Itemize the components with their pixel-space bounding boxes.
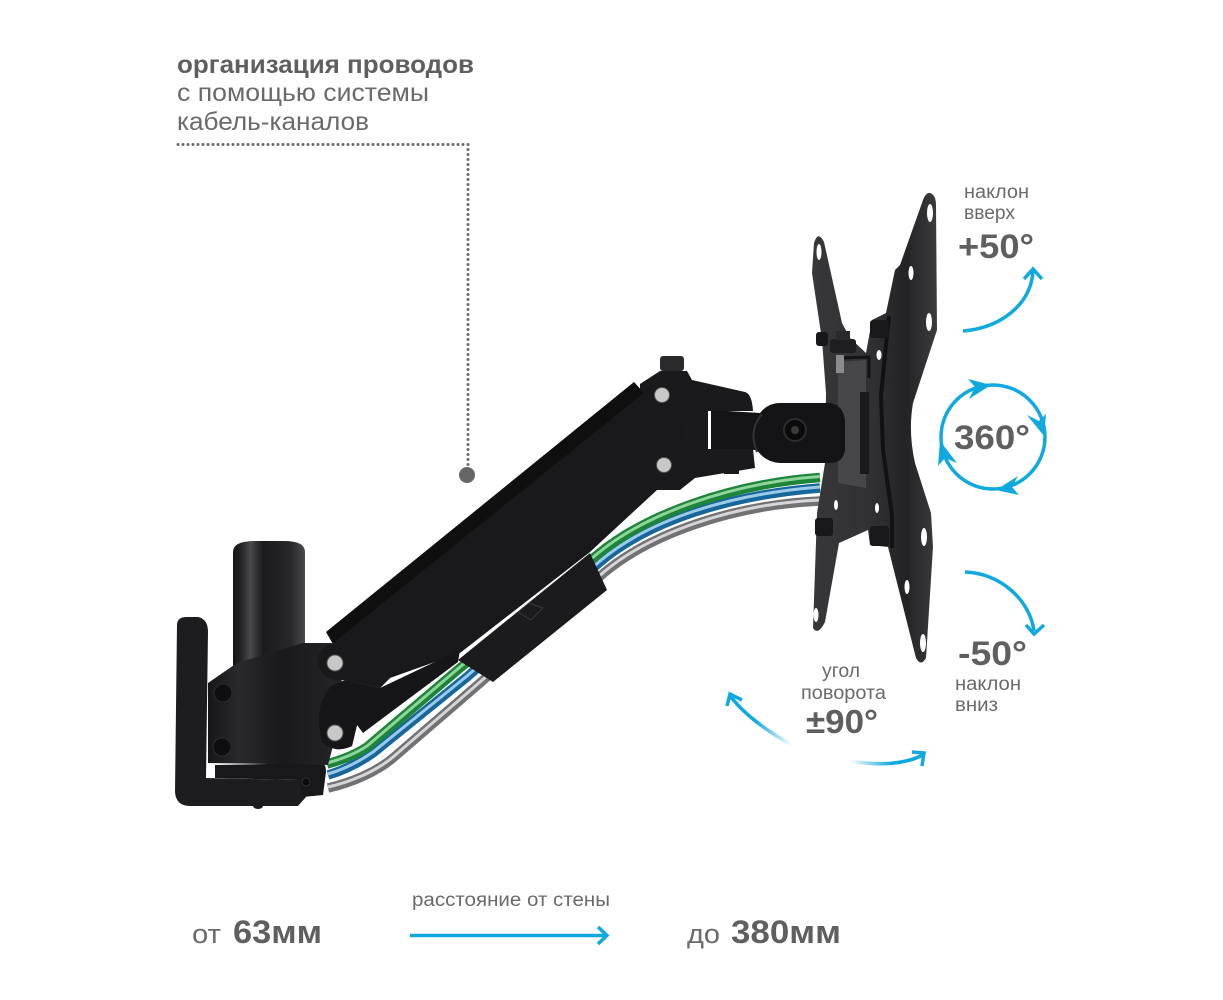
label: 360 degrees: 360° <box>954 419 1030 457</box>
arrow: distance <box>410 927 607 944</box>
tilt down label: наклон <box>955 674 1021 695</box>
wall distance: minimum: 63мм <box>233 914 322 950</box>
arm body <box>317 386 682 688</box>
cable: green <box>327 476 820 764</box>
wall bracket <box>175 541 390 809</box>
lower strut <box>319 650 460 749</box>
upper channel <box>326 382 645 644</box>
cable bundle <box>327 476 820 788</box>
heading: cable management: с помощью системы <box>177 79 429 107</box>
clamp bolts <box>213 684 232 756</box>
mounting holes <box>814 204 933 652</box>
upper hinge link <box>640 356 755 490</box>
adjustment knob <box>830 339 856 353</box>
wall distance: minimum: от <box>192 919 221 949</box>
tilt up label: +50° <box>958 228 1034 266</box>
arrow: tilt up <box>963 269 1042 331</box>
wall distance: maximum <box>687 914 841 950</box>
tilt up label: наклон <box>964 182 1029 203</box>
main arm <box>317 382 682 749</box>
centre bracket <box>838 360 866 488</box>
pivot screws <box>327 388 672 741</box>
post <box>233 541 305 680</box>
arrow: swivel right <box>850 752 924 766</box>
tilt down label: вниз <box>955 695 998 716</box>
arrow: swivel left <box>727 694 792 745</box>
arrow: tilt down <box>965 572 1044 634</box>
lower arm plate repeat <box>317 644 390 688</box>
tilt joint <box>711 403 845 463</box>
swivel label: ±90° <box>806 703 878 740</box>
base disc <box>215 763 326 797</box>
mounting nuts <box>815 320 889 546</box>
swivel label: угол <box>822 661 860 682</box>
cable cover <box>458 553 607 682</box>
callout: dotted leader line <box>178 144 475 483</box>
VESA mounting plate <box>812 193 937 662</box>
wall distance: maximum: 380мм <box>731 914 841 950</box>
wall distance: maximum: до <box>687 919 720 949</box>
heading: cable management <box>177 51 474 136</box>
clamp body <box>208 643 345 765</box>
wall distance: minimum <box>192 914 322 950</box>
cable: blue <box>328 487 820 775</box>
right panel ridge <box>881 316 892 548</box>
tilt up label: вверх <box>964 203 1015 224</box>
tilt down label: -50° <box>958 635 1027 673</box>
heading: cable management: кабель-каналов <box>177 108 369 136</box>
swivel label <box>801 661 886 740</box>
L-shaped wall plate <box>175 617 306 806</box>
swivel label: поворота <box>801 683 886 704</box>
tilt down label <box>955 635 1027 716</box>
tilt up label <box>958 182 1034 266</box>
cable: gray <box>328 500 820 788</box>
heading: cable management: организация проводов <box>177 51 474 79</box>
wall distance: caption: расстояние от стены <box>412 890 610 911</box>
arrow: 360 rotation ring <box>938 379 1046 495</box>
